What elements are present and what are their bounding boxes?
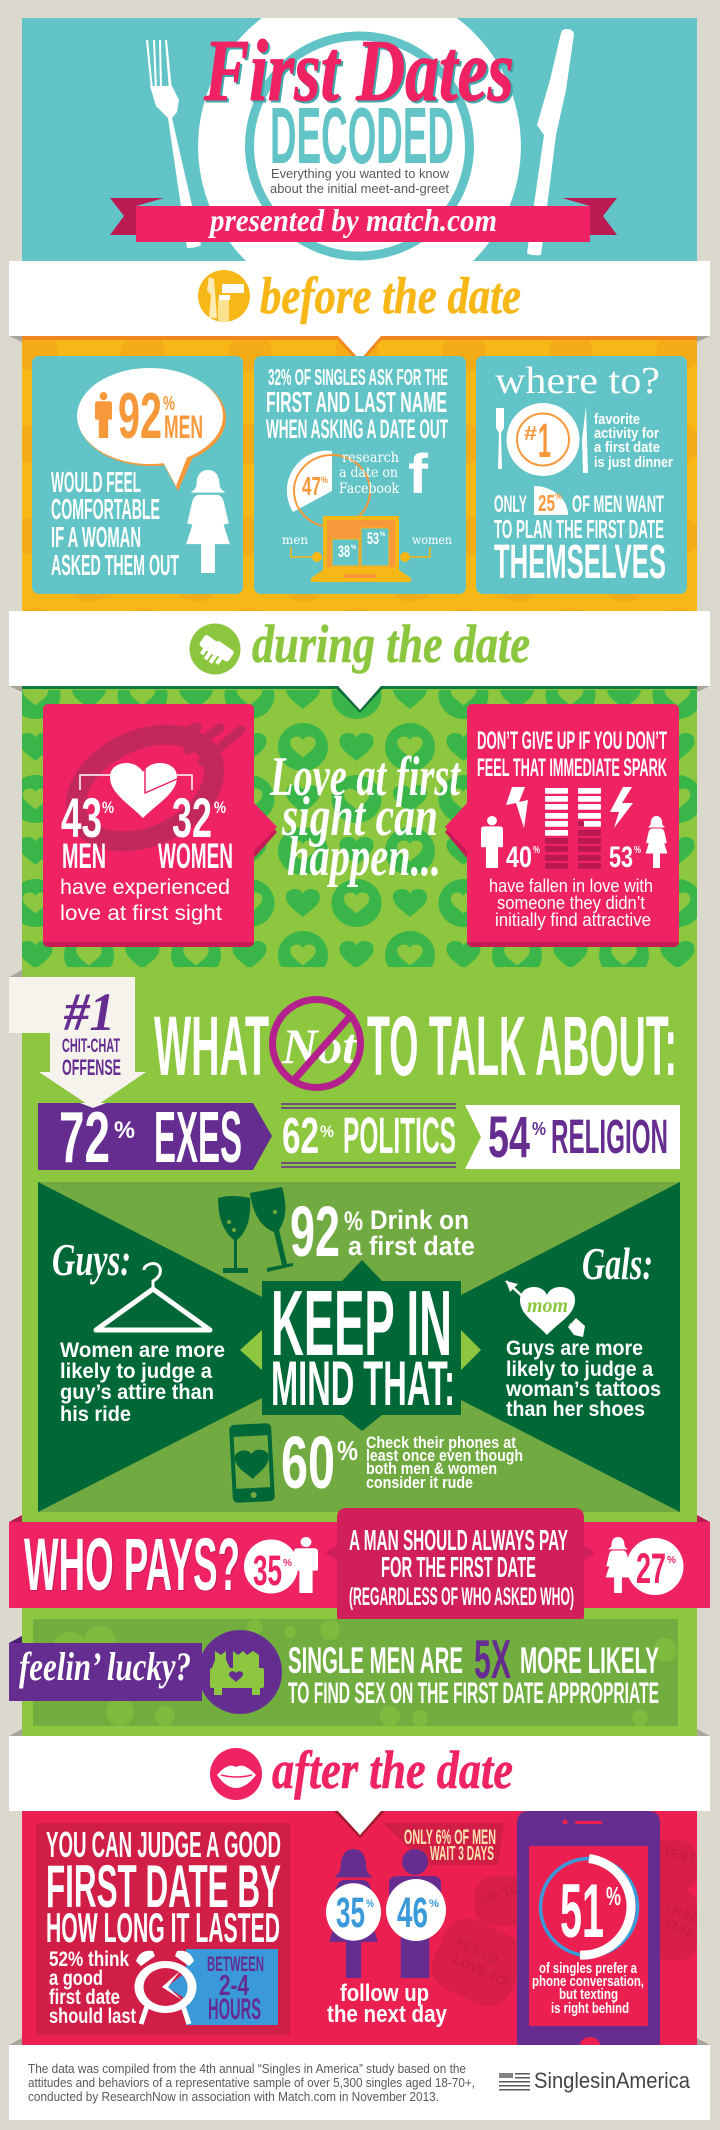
stat: 51%: %: [606, 1881, 621, 1911]
label: women: women: [412, 533, 452, 547]
icon: mom heart tattoo: [506, 1281, 585, 1337]
center box: [240, 1260, 481, 1431]
pie: 47% research on Facebook: [287, 451, 370, 527]
infographic: First Dates Decoded: POLITICS: [343, 1107, 456, 1164]
panel: where to: [476, 356, 687, 594]
stat band: 72% exes: 72: [59, 1098, 110, 1178]
stat band: 54% religion: [465, 1105, 680, 1170]
panel: keep in mind: [38, 1182, 680, 1512]
stat band: 62% politics: [281, 1104, 456, 1167]
hours box: BETWEEN: [207, 1953, 264, 1976]
text: 32% of singles: [266, 364, 448, 444]
chart: 51% donut: [540, 1858, 638, 1956]
panel: 92% men: [32, 356, 243, 594]
text: don't give up: [477, 727, 667, 782]
stat: 92% drink: a first date: [348, 1231, 475, 1261]
icon: wine glasses: [218, 1187, 293, 1273]
icon: plate with #1: 1: [538, 415, 551, 468]
icon: plate with #1: [496, 403, 588, 476]
stat: 92% drink: [290, 1193, 475, 1272]
text: research a date on Facebook: [339, 450, 399, 497]
panel: after the date: [22, 1811, 720, 2045]
stat: 27% women: 27: [636, 1545, 666, 1593]
callout: #1 chit-chat offense: CHIT-CHAT: [62, 1036, 120, 1057]
stat: 92% men: MEN: [164, 409, 203, 445]
icon: hanger: [96, 1264, 210, 1330]
stat band: 72% exes: %: [114, 1117, 135, 1144]
icon: woman 35%: %: [366, 1898, 374, 1910]
background speech bubbles: I HAD: [664, 1899, 702, 1928]
panel: 92% men: ASKED THEM OUT: [51, 550, 179, 582]
text: 32% of singles: 32% OF SINGLES ASK FOR THE: [268, 364, 448, 390]
flag: feelin lucky: feelin’ lucky?: [19, 1644, 191, 1689]
box: judge a good first date: 52% think: [49, 1948, 129, 1971]
icon: handshake: [190, 624, 240, 674]
panel: header: DECODED: [270, 91, 454, 180]
flag: feelin lucky: [9, 1630, 282, 1714]
icon: lips: [210, 1748, 262, 1800]
title: First Dates: First Dates: [203, 23, 514, 120]
stat: 40%: 40: [506, 841, 532, 874]
stat: 43% men: 43: [61, 786, 102, 849]
callout: a man should always pay: FOR THE FIRST DATE: [381, 1552, 536, 1584]
heading: love at first sight can happen: [269, 746, 461, 888]
hours box: [186, 1949, 278, 2026]
icon: woman 35%: [326, 1849, 381, 1978]
stat: 53%: %: [634, 845, 641, 856]
box: judge a good first date: first date: [49, 1986, 120, 2009]
callout: only 6% of men: ONLY 6% OF MEN: [404, 1826, 496, 1849]
text: would feel comfortable: IF A WOMAN: [51, 522, 141, 554]
text: have experienced: have experienced: [60, 876, 230, 899]
text: research a date on Facebook: a date on: [339, 465, 398, 481]
icon: woman: [646, 816, 667, 868]
icon: toothbrush and razor: [198, 270, 250, 322]
text: single men 5x: [288, 1628, 659, 1710]
stat: 40%: %: [533, 845, 540, 856]
text block: guys: likely to judge a: [60, 1359, 213, 1383]
icon: alarm clock: [134, 1951, 196, 2024]
text: have experienced: love at first sight: [60, 902, 222, 925]
text: single men 5x: SINGLE MEN ARE: [288, 1640, 463, 1681]
text: research a date on Facebook: Facebook: [339, 481, 399, 497]
text: only 25% of men want: %: [555, 492, 562, 501]
stat: 32% women: 32: [172, 786, 212, 849]
text: favorite activity: favorite: [594, 411, 640, 428]
subtitle: about the initial meet-and-greet: [270, 181, 449, 196]
text: prefer a phone conversation: [532, 1960, 644, 2017]
banner: during the date: [9, 611, 710, 713]
text: prefer a phone conversation: of singles prefer a: [539, 1960, 637, 1977]
text: prefer a phone conversation: but texting: [559, 1986, 618, 2003]
card: don't give up: [445, 704, 679, 947]
background speech bubbles: ME TOO: [478, 1876, 531, 1908]
label: men: men: [282, 533, 308, 547]
text: have fallen in love: initially find attractive: [495, 910, 651, 930]
stat: 35% men: %: [283, 1558, 292, 1569]
ribbon: presented by match.com: presented by match.com: [207, 202, 497, 238]
heading: what not to talk about: WHAT: [154, 999, 269, 1093]
stat: 60% check phones: least once even though: [366, 1447, 523, 1465]
stat band: 54% religion: 54: [488, 1105, 530, 1170]
heading: what not to talk about: Not: [281, 1018, 358, 1074]
background speech bubbles: TEXT ME: [661, 1843, 720, 1873]
speech bubble: [77, 368, 226, 491]
callout: #1 chit-chat offense: OFFENSE: [62, 1055, 121, 1080]
text: follow up the next day: the next day: [327, 2001, 448, 2028]
stat: 92% men: %: [163, 393, 175, 415]
callout: #1 chit-chat offense: #1: [63, 982, 115, 1042]
stat: 32% women: %: [214, 798, 226, 817]
background speech bubbles: YES I’D: [453, 1934, 501, 1967]
icon: fork: [146, 40, 201, 248]
background speech bubbles: LOVE TO!: [451, 1951, 512, 1991]
text: source note: The data was compiled from the 4th annual “Singles in America” study based on the: [28, 2061, 466, 2076]
icon: laptop with bars: %: [351, 545, 357, 551]
text: favorite activity: activity for: [594, 425, 659, 442]
stat: 43% men: %: [102, 798, 114, 817]
panel: during the date background: [22, 686, 697, 1736]
stat: 92% drink: 92: [290, 1193, 340, 1272]
icon: man: [95, 392, 112, 438]
text block: guys: his ride: [60, 1402, 131, 1426]
box: judge a good first date: a good: [49, 1967, 103, 1990]
stat: 27% women: %: [667, 1555, 676, 1566]
text: single men 5x: 5X: [474, 1628, 511, 1690]
center box: MIND THAT:: [271, 1349, 455, 1419]
hours box: HOURS: [208, 1993, 261, 2026]
text: favorite activity: [594, 411, 673, 471]
text: have experienced: [60, 876, 230, 925]
icon: man 46%: [386, 1849, 446, 1978]
heading: before the date: before the date: [260, 268, 521, 325]
stat: 51%: 51: [560, 1869, 604, 1954]
heading: love at first sight can happen: happen...: [287, 826, 441, 888]
icon: heart: [80, 763, 192, 818]
stat: 43% men: [61, 786, 114, 876]
text: have fallen in love: have fallen in love with: [489, 876, 653, 896]
heading: where to?: where to?: [495, 360, 660, 402]
text block: guys: Women are more: [60, 1338, 225, 1362]
icon: laptop with bars: [311, 516, 411, 582]
pie: 47% research on Facebook: %: [321, 475, 328, 485]
stat: 35% men: 35: [253, 1547, 282, 1595]
icon: woman: [186, 470, 230, 573]
stat band: 54% religion: %: [532, 1119, 546, 1139]
heading: during the date: during the date: [252, 614, 530, 674]
footer: [9, 2038, 710, 2120]
text: only 25% of men want: ONLY: [494, 491, 527, 518]
icon: bed: [210, 1651, 264, 1695]
stat: 35% men: [244, 1537, 318, 1595]
text: 32% of singles: FIRST AND LAST NAME: [266, 387, 447, 419]
text: 32% of singles: WHEN ASKING A DATE OUT: [266, 414, 448, 444]
background speech bubbles: [432, 1840, 697, 2006]
callout: #1 chit-chat offense: [9, 970, 146, 1108]
icon: man 46%: %: [429, 1898, 439, 1910]
text block: gals: than her shoes: [506, 1398, 645, 1421]
text: favorite activity: is just dinner: [594, 454, 673, 471]
callout: only 6% of men: WAIT 3 DAYS: [430, 1843, 494, 1865]
stat: 60% check phones: consider it rude: [366, 1474, 473, 1492]
text: have fallen in love: [489, 876, 653, 930]
icon: plate with #1: #: [524, 423, 537, 445]
panel: feelin lucky: [9, 1619, 678, 1726]
text: prefer a phone conversation: is right behind: [551, 2000, 629, 2017]
text block: gals: likely to judge a: [506, 1358, 653, 1381]
label: women: [400, 533, 452, 562]
stat: 32% women: [158, 786, 233, 876]
stat: 92% drink: %: [344, 1206, 363, 1236]
text: would feel comfortable: WOULD FEEL: [51, 467, 141, 499]
hours box: 2-4: [219, 1970, 249, 2002]
panel: first and last name: [254, 356, 466, 594]
subtitle: Everything you wanted to know: [271, 166, 450, 181]
panel: header: [22, 18, 697, 261]
banner: after the date: [9, 1729, 710, 1838]
text block: guys: [52, 1234, 225, 1426]
stat: 92% men: 92: [118, 379, 162, 452]
icon: facebook f: f: [408, 442, 428, 505]
box: judge a good first date: should last: [49, 2005, 136, 2028]
callout: only 6% of men: [383, 1823, 504, 1865]
text: favorite activity: a first date: [594, 439, 660, 456]
icon: eye: [59, 714, 241, 862]
heading: after the date: after the date: [272, 1740, 513, 1800]
heading: love at first sight can happen: sight can: [281, 786, 438, 848]
icon: laptop with bars: %: [380, 532, 386, 538]
panel: before the date background: [22, 336, 697, 611]
stat: 60% check phones: Check their phones at: [366, 1434, 516, 1452]
text: prefer a phone conversation: phone conversation,: [532, 1973, 644, 1990]
phone: [517, 1811, 660, 2045]
text block: gals: [505, 1238, 661, 1421]
text block: gals: Guys are more: [506, 1337, 643, 1360]
stat: 60% check phones: both men & women: [366, 1460, 497, 1478]
stat band: 72% exes: [38, 1098, 272, 1178]
text: source note: [28, 2061, 475, 2104]
icon: mom heart tattoo: mom: [527, 1295, 568, 1317]
icon: laptop with bars: 38: [338, 542, 350, 561]
text block: guys: Guys:: [52, 1234, 131, 1285]
icon: prohibition sign: [272, 1000, 360, 1088]
icon: knife: [527, 29, 574, 255]
heading: what not to talk about: [154, 999, 677, 1093]
stat band: 62% politics: 62: [282, 1107, 319, 1164]
chart: stacked bar columns: [545, 788, 601, 869]
stat: 60% check phones: %: [337, 1435, 358, 1466]
subtitle: [270, 166, 450, 196]
heading: love at first sight can happen: Love at first: [269, 746, 461, 808]
label: men: [282, 533, 322, 562]
text block: gals: Gals:: [582, 1238, 653, 1289]
stat band: 62% politics: %: [320, 1122, 334, 1141]
logo: Singles in America: SinglesinAmerica: [534, 2068, 691, 2093]
text: only 25% of men want: 25: [538, 490, 555, 516]
card: love at first sight stats: [43, 704, 277, 947]
stat band: 72% exes: EXES: [154, 1098, 242, 1178]
text: would feel comfortable: [51, 467, 179, 582]
stat: 43% men: MEN: [62, 837, 106, 876]
icon: woman 35%: 35: [336, 1889, 365, 1937]
center box: KEEP IN: [271, 1271, 452, 1375]
text: source note: conducted by ResearchNow in association with Match.com in November 2013.: [28, 2089, 439, 2104]
stat: 60% check phones: 60: [281, 1421, 335, 1504]
text: research a date on Facebook: research: [342, 450, 399, 466]
stat: 60% check phones: [281, 1421, 523, 1504]
band: who pays: WHO PAYS?: [24, 1523, 240, 1606]
icon: laptop with bars: 53: [367, 529, 379, 548]
text: follow up the next day: follow up: [340, 1980, 429, 2007]
text: have fallen in love: someone they didn’t: [497, 893, 645, 913]
icon: phone: [229, 1423, 275, 1503]
text: only 25% of men want: [494, 486, 666, 589]
icon: man: [481, 816, 503, 868]
stat: 92% drink: Drink on: [370, 1205, 469, 1235]
background speech bubbles: FUN!: [663, 1915, 697, 1942]
stat: 27% women: [606, 1537, 684, 1595]
icon: man 46%: 46: [397, 1889, 428, 1937]
banner: before the date: [9, 261, 710, 364]
box: judge a good first date: FIRST DATE BY: [46, 1853, 281, 1920]
band: who pays: [9, 1508, 710, 1625]
text: source note: attitudes and behaviors of a representative sample of over 5,300 singles aged 18-70+,: [28, 2075, 475, 2090]
pie: 47% research on Facebook: 47: [302, 471, 321, 501]
icon: lightning bolts: [506, 787, 633, 828]
text: would feel comfortable: COMFORTABLE: [51, 494, 160, 526]
callout: a man should always pay: [325, 1508, 595, 1625]
box: judge a good first date: YOU CAN JUDGE A GOOD: [46, 1824, 281, 1865]
box: judge a good first date: HOW LONG IT LASTED: [46, 1904, 280, 1951]
ribbon: presented by match.com: [110, 198, 617, 242]
box: judge a good first date: [36, 1823, 290, 2035]
stat: 53%: 53: [609, 841, 633, 874]
icon: plate: [198, 18, 521, 261]
decorative clovers: [52, 1619, 677, 1726]
stat: 32% women: WOMEN: [158, 837, 233, 876]
text: follow up the next day: [327, 1980, 448, 2028]
text block: gals: woman’s tattoos: [505, 1378, 661, 1401]
text block: guys: guy’s attire than: [60, 1380, 214, 1404]
